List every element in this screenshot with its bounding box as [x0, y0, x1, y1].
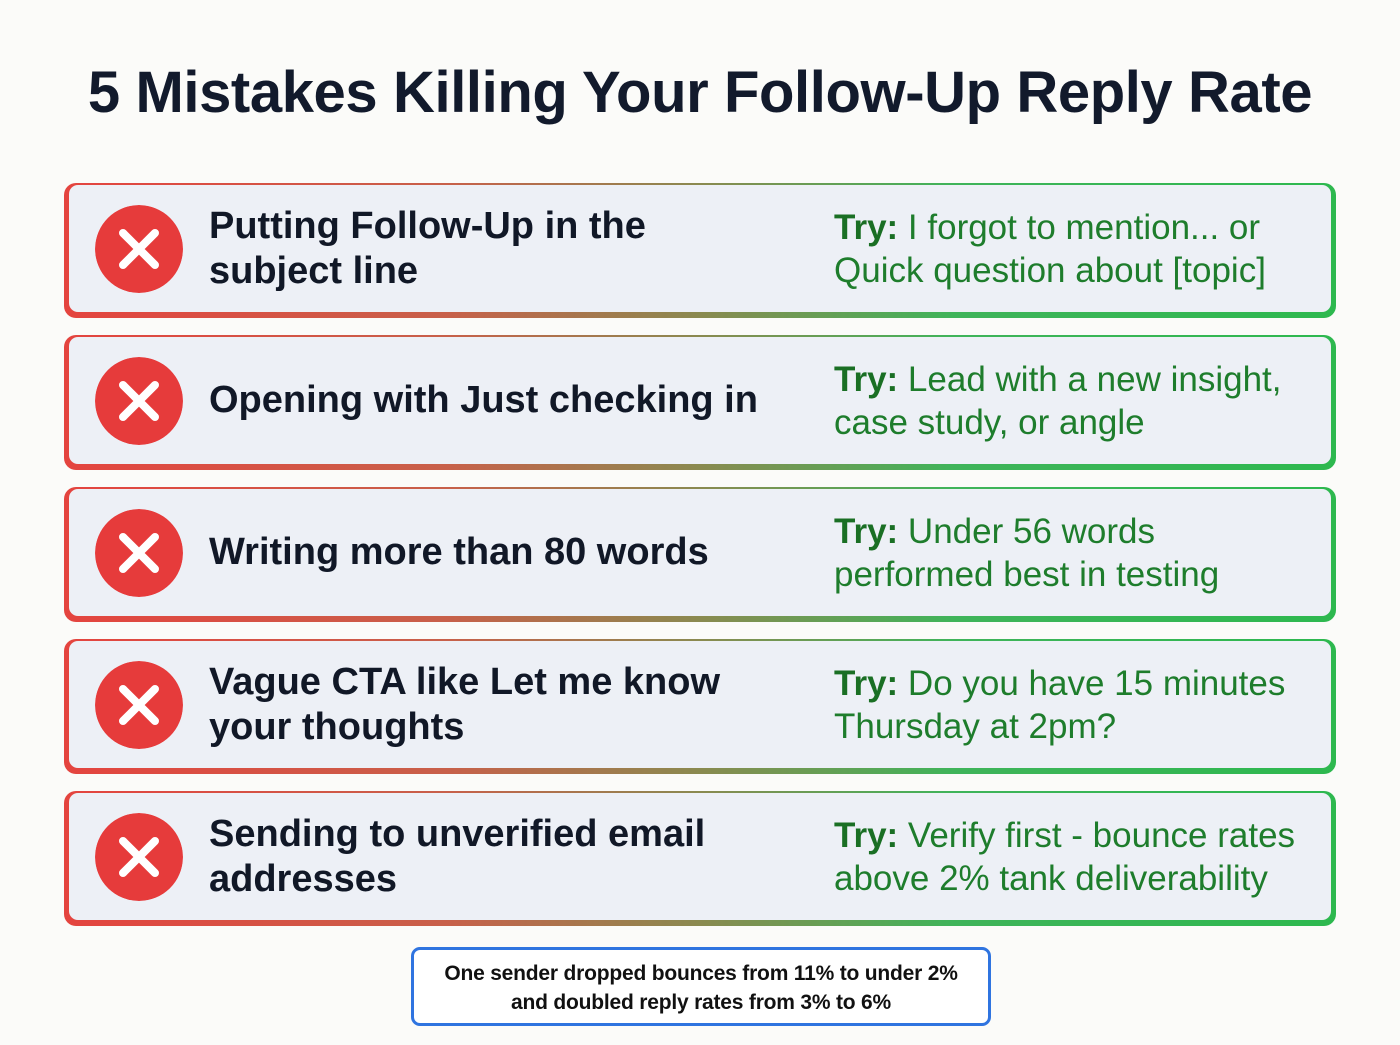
icon: red x — [95, 509, 183, 597]
mistake text: Putting Follow-Up in the subject line — [209, 204, 646, 292]
fix text — [834, 512, 1219, 594]
card 1 — [64, 183, 1336, 318]
fix text: performed best in testing — [834, 554, 1219, 594]
fix text: Try: Verify first - bounce rates above 2% tank deliverability — [834, 816, 1295, 898]
mistake text: Opening with Just checking in — [209, 379, 758, 421]
card 3 — [64, 487, 1336, 622]
fix text: Try: Under 56 words — [834, 512, 1155, 550]
fix text: Try: Do you have 15 minutes Thursday at 2pm? — [834, 664, 1285, 746]
fix text: Try: I forgot to mention... or Quick question about [topic] — [834, 208, 1266, 290]
callout: One sender dropped bounces from 11% to under 2% — [444, 962, 958, 985]
card 4 — [64, 639, 1336, 774]
fix text: Try: Lead with a new insight, case study, or angle — [834, 360, 1282, 442]
callout: and doubled reply rates from 3% to 6% — [511, 991, 891, 1014]
icon: red x — [95, 357, 183, 445]
mistake text: Vague CTA like Let me know your thoughts — [209, 660, 720, 748]
title: 5 Mistakes Killing Your Follow-Up Reply Rate — [88, 60, 1312, 125]
callout — [411, 947, 991, 1026]
card 5 — [64, 791, 1336, 926]
card 2 — [64, 335, 1336, 470]
icon: red x — [95, 813, 183, 901]
icon: red x — [95, 205, 183, 293]
mistake text: Writing more than 80 words — [209, 531, 709, 573]
icon: red x — [95, 661, 183, 749]
mistake text: Sending to unverified email addresses — [209, 812, 705, 900]
